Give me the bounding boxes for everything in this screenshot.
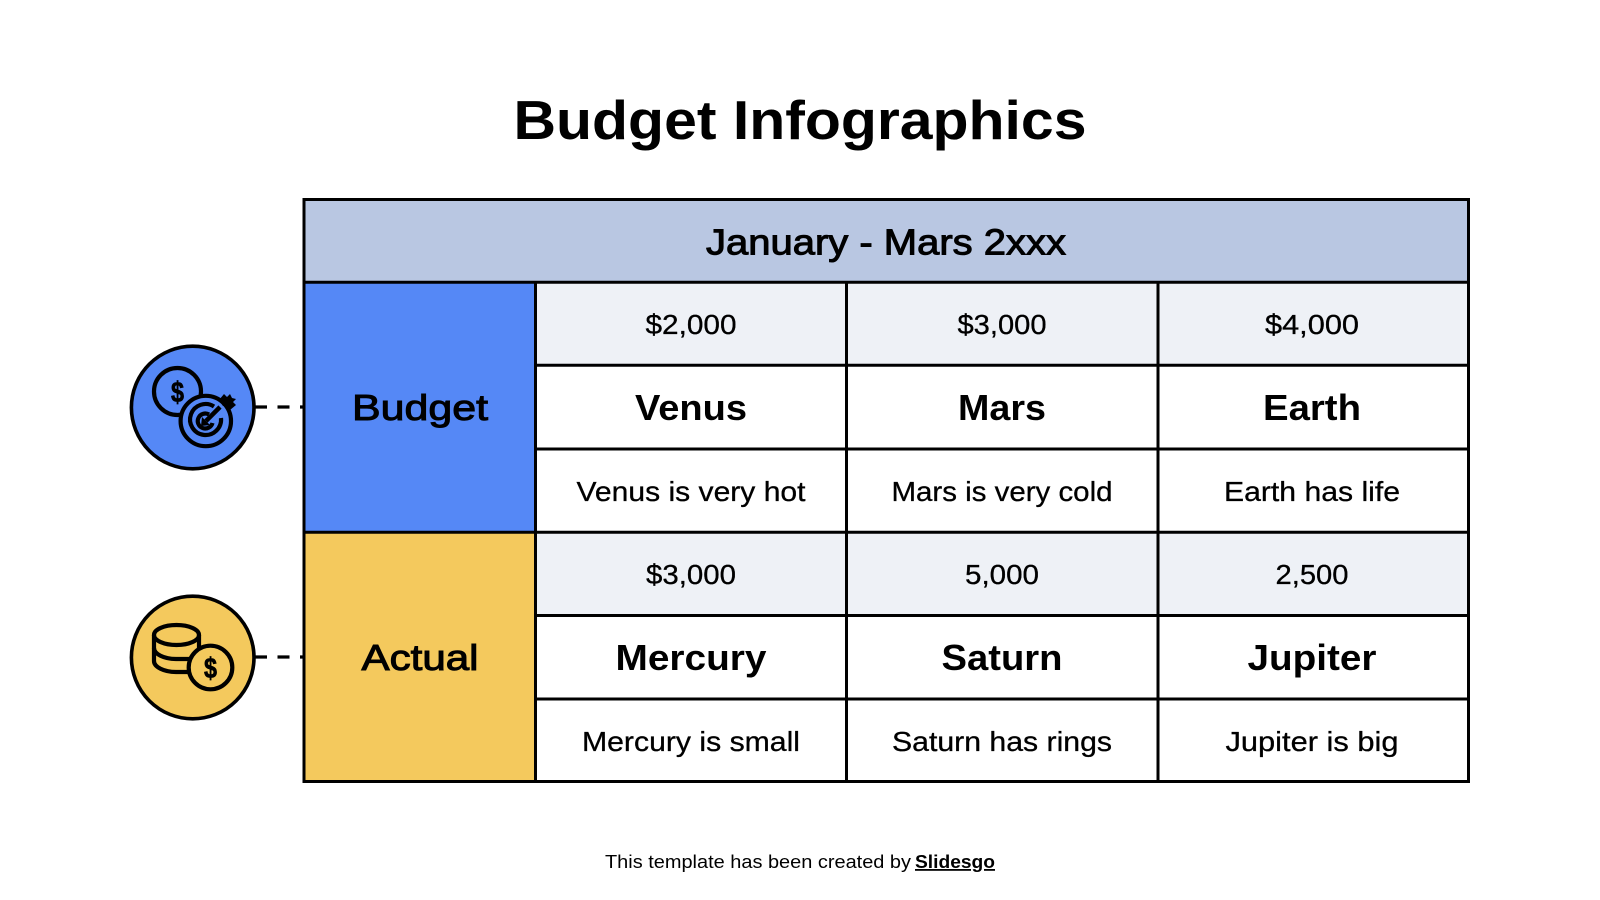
budget descriptions row: Venus is very hot [576,476,806,507]
actual planet names row [616,637,1376,678]
icon: coin stack and dollar coin [131,596,254,719]
actual descriptions row: Saturn has rings [892,726,1112,757]
budget amounts row: $4,000 [1265,309,1359,340]
actual amounts row: $3,000 [646,559,736,590]
budget planet names row: Mars [958,387,1046,428]
budget planet names row [635,387,1361,428]
budget amounts row: $3,000 [958,309,1046,340]
actual planet names row: Jupiter [1248,637,1376,678]
actual descriptions row [582,726,1398,757]
actual amounts row: 2,500 [1276,559,1348,590]
budget descriptions row: Mars is very cold [892,476,1112,507]
actual amounts row [536,532,1469,616]
connector: budget [255,405,304,409]
budget planet names row: Venus [635,387,747,428]
actual amounts row: 5,000 [965,559,1039,590]
row label: actual [304,532,536,782]
budget descriptions row [576,476,1400,507]
connector: actual [255,655,304,659]
budget amounts row [536,282,1469,366]
actual planet names row: Mercury [616,637,766,678]
icon: coin stack and dollar coin: $ [204,653,217,685]
row label: budget: Budget [352,387,488,428]
row label: actual: Actual [362,637,478,678]
actual planet names row: Saturn [942,637,1062,678]
title: Budget Infographics [514,89,1086,151]
table [304,198,1469,783]
budget planet names row: Earth [1263,387,1361,428]
actual descriptions row: Jupiter is big [1226,726,1398,757]
actual descriptions row: Mercury is small [582,726,800,757]
budget amounts row: $2,000 [646,309,736,340]
budget descriptions row: Earth has life [1224,476,1400,507]
footer credit: Slidesgo [915,852,995,872]
row label: budget [304,282,536,532]
table header: period: January - Mars 2xxx [706,222,1066,262]
footer credit: This template has been created by [605,852,911,872]
table header: period [304,200,1469,282]
icon: budget target and coin: $ [171,377,184,409]
icon: budget target and coin [131,346,254,469]
